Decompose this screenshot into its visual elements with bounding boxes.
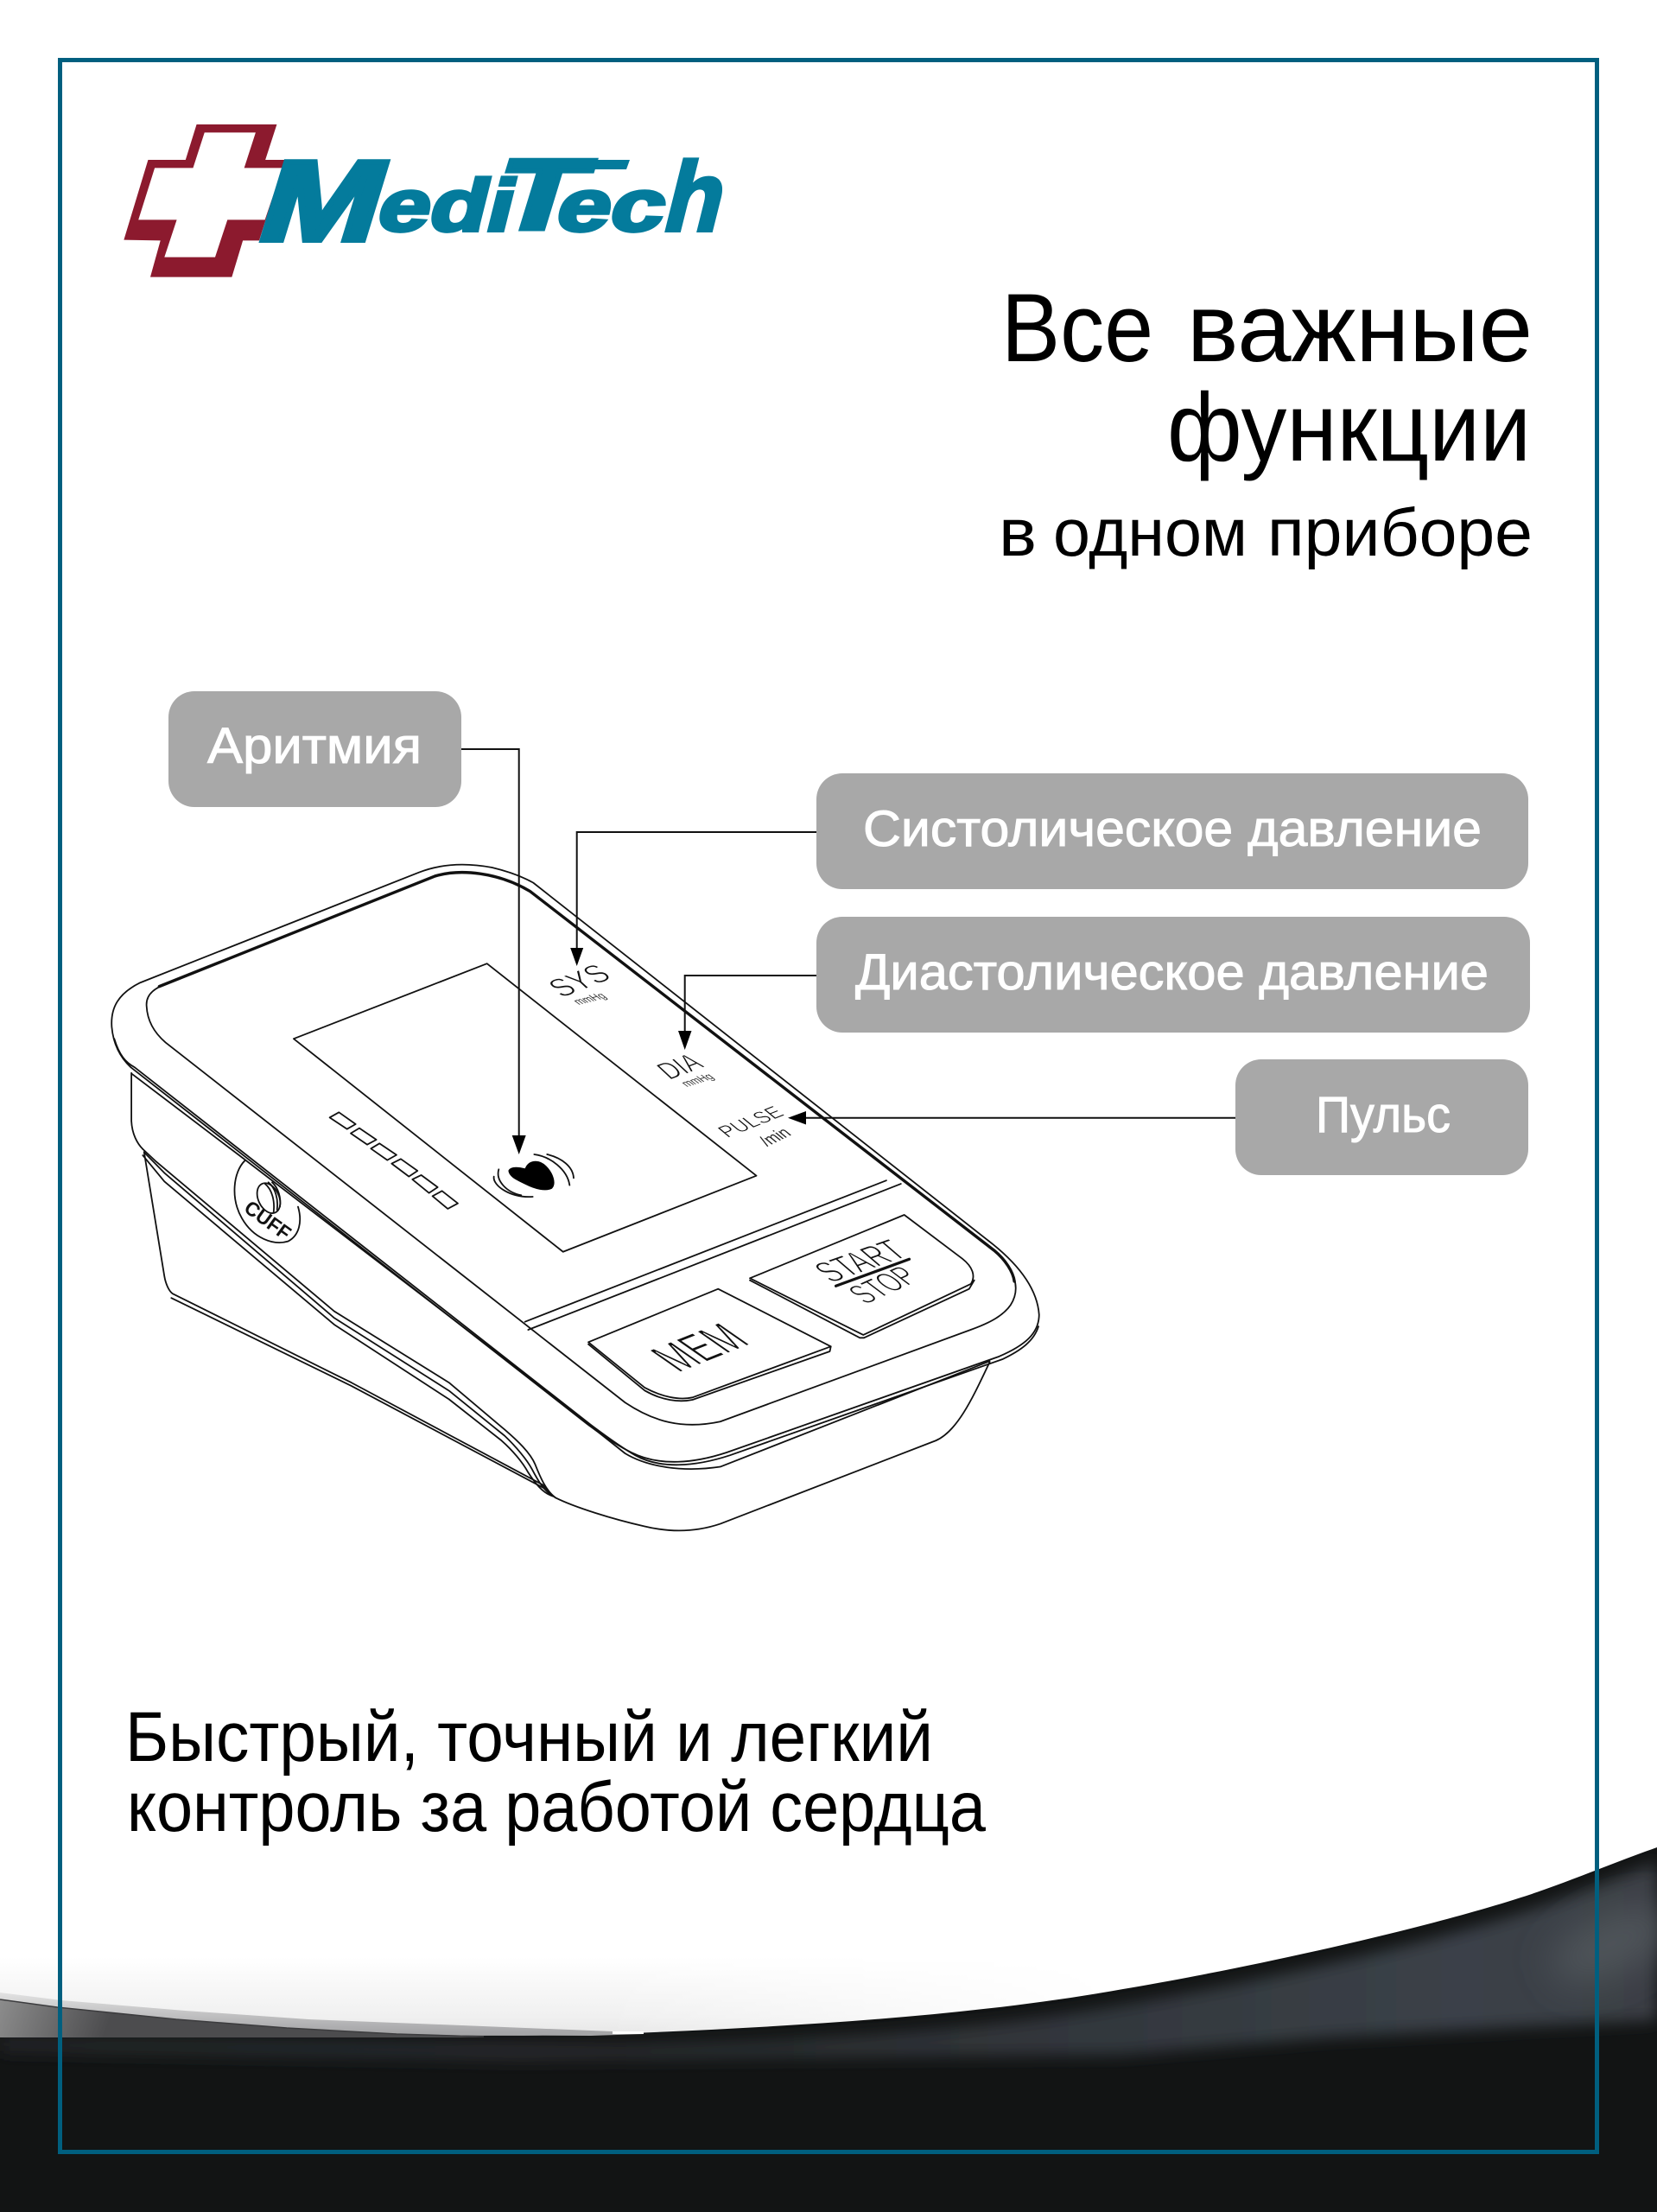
cuff port bbox=[234, 1160, 300, 1244]
callout: Систолическое давление: Систолическое давление bbox=[863, 801, 1482, 857]
callout: Диастолическое давление: Диастолическое давление bbox=[855, 944, 1489, 1001]
arrow: SYS bbox=[570, 832, 816, 966]
callout: Аритмия: Аритмия bbox=[207, 718, 422, 774]
memory indicator squares bbox=[330, 1112, 458, 1209]
title: Все bbox=[1001, 274, 1153, 382]
device illustration: blood pressure monitor bbox=[111, 865, 1039, 1530]
callout: Пульс bbox=[1235, 1059, 1528, 1175]
device body lines bbox=[111, 865, 1039, 1530]
logo wordmark: h bbox=[655, 142, 740, 252]
bottom text bbox=[125, 1698, 986, 1847]
button: START/STOP: STOP bbox=[840, 1260, 927, 1309]
logo wordmark: T bbox=[482, 139, 603, 251]
device bezel bbox=[147, 873, 1016, 1425]
title bbox=[999, 274, 1533, 570]
title: функции bbox=[1167, 373, 1531, 481]
callout: Аритмия bbox=[168, 691, 461, 807]
logo cross bbox=[124, 124, 285, 277]
icon: arrhythmia heart bbox=[494, 1154, 574, 1197]
button: MEM: MEM bbox=[637, 1315, 762, 1380]
logo wordmark: edi bbox=[370, 165, 525, 247]
background swoosh bbox=[0, 1847, 1657, 2212]
callout: Систолическое давление bbox=[816, 773, 1528, 889]
logo wordmark: M bbox=[245, 137, 403, 264]
device lid outline bbox=[111, 865, 1039, 1462]
logo wordmark: ec bbox=[549, 165, 676, 247]
bottom text: Быстрый, точный и легкий bbox=[125, 1698, 933, 1777]
arrow: DIA bbox=[678, 976, 816, 1050]
title: одном bbox=[1053, 494, 1248, 570]
cuff port: CUFF bbox=[240, 1196, 295, 1244]
callout: Пульс: Пульс bbox=[1316, 1087, 1451, 1143]
title: приборе bbox=[1267, 494, 1533, 570]
screen labels: mmHg bbox=[570, 991, 610, 1007]
screen labels bbox=[541, 958, 796, 1149]
button: START/STOP: START bbox=[805, 1234, 916, 1289]
screen labels: /min bbox=[755, 1125, 796, 1149]
logo wordmark bbox=[245, 137, 740, 264]
callout: Диастолическое давление bbox=[816, 917, 1530, 1033]
screen labels: DIA bbox=[650, 1048, 711, 1084]
button: MEM bbox=[588, 1289, 831, 1401]
bottom text: контроль за работой сердца bbox=[127, 1768, 986, 1847]
arrow: PULSE bbox=[788, 1111, 1235, 1125]
screen labels: PULSE bbox=[713, 1103, 790, 1141]
title: важные bbox=[1187, 274, 1533, 382]
screen labels: mmHg bbox=[678, 1071, 718, 1089]
title: в bbox=[999, 494, 1037, 570]
button: START/STOP bbox=[750, 1215, 975, 1338]
logo: MediTech bbox=[124, 124, 740, 277]
arrow: Аритмия bbox=[461, 749, 526, 1154]
device screen bbox=[294, 963, 757, 1252]
screen labels: SYS bbox=[541, 958, 618, 1002]
